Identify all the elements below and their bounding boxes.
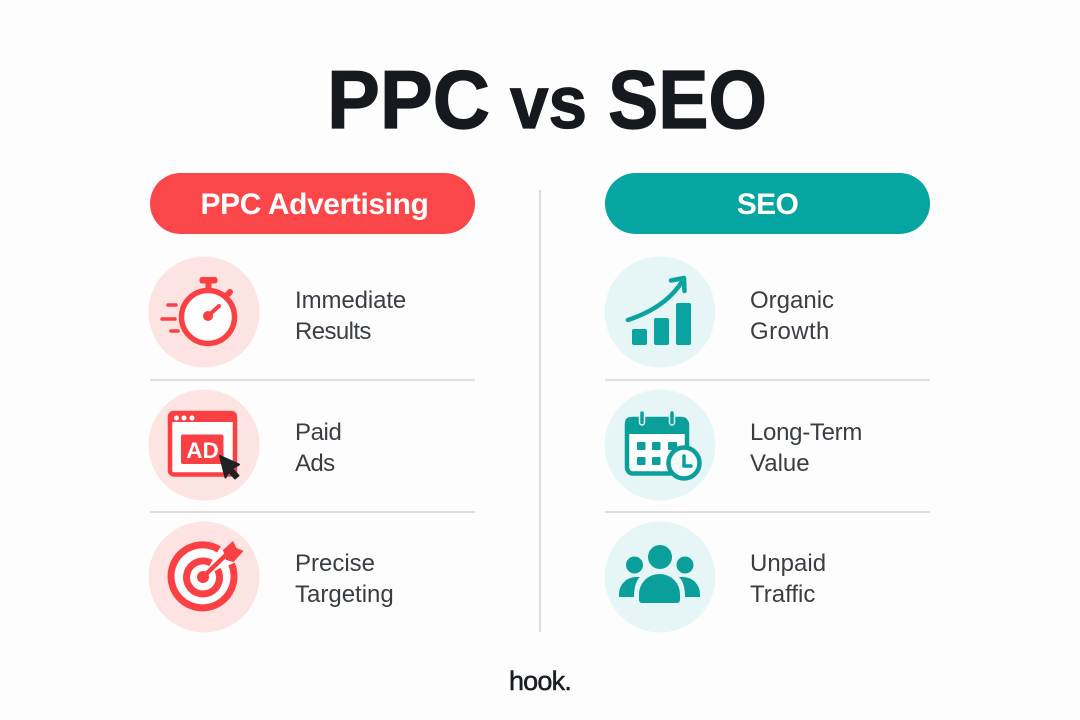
- label: Long-Term Value: [750, 419, 862, 477]
- title: [327, 53, 767, 146]
- icon: growth chart: [604, 256, 716, 368]
- label: Organic Growth: [750, 287, 834, 345]
- icon: ad window: [148, 390, 260, 500]
- label: Precise Targeting: [295, 550, 394, 608]
- title: vs: [510, 61, 587, 144]
- icon: ad window: AD: [186, 438, 219, 463]
- label: Paid Ads: [295, 419, 341, 477]
- panel header: PPC Advertising: [150, 173, 475, 234]
- label: Long-Term Value: Value: [750, 450, 810, 477]
- icon: target: [148, 522, 260, 632]
- label: Unpaid Traffic: [750, 550, 826, 608]
- label: Precise Targeting: Precise: [295, 550, 375, 577]
- label: Paid Ads: Paid: [295, 419, 341, 446]
- label: Organic Growth: Growth: [750, 318, 830, 345]
- icon: people: [604, 522, 716, 632]
- label: Immediate Results: Immediate: [295, 287, 406, 314]
- center divider: [539, 190, 541, 632]
- panel header: PPC Advertising: PPC Advertising: [201, 188, 428, 221]
- label: Unpaid Traffic: Traffic: [750, 581, 815, 608]
- logo: hook: hook.: [509, 666, 571, 696]
- icon: calendar with clock: [604, 390, 716, 500]
- label: Unpaid Traffic: Unpaid: [750, 550, 826, 577]
- title: PPC: [327, 53, 490, 146]
- title: SEO: [608, 53, 767, 146]
- label: Paid Ads: Ads: [295, 450, 335, 477]
- label: Long-Term Value: Long-Term: [750, 419, 862, 446]
- label: Immediate Results: [295, 287, 406, 345]
- label: Immediate Results: Results: [295, 318, 371, 345]
- panel header: SEO: [605, 173, 930, 234]
- panel header: SEO: SEO: [737, 188, 798, 221]
- label: Organic Growth: Organic: [750, 287, 834, 314]
- label: Precise Targeting: Targeting: [295, 581, 394, 608]
- icon: stopwatch: [148, 256, 260, 368]
